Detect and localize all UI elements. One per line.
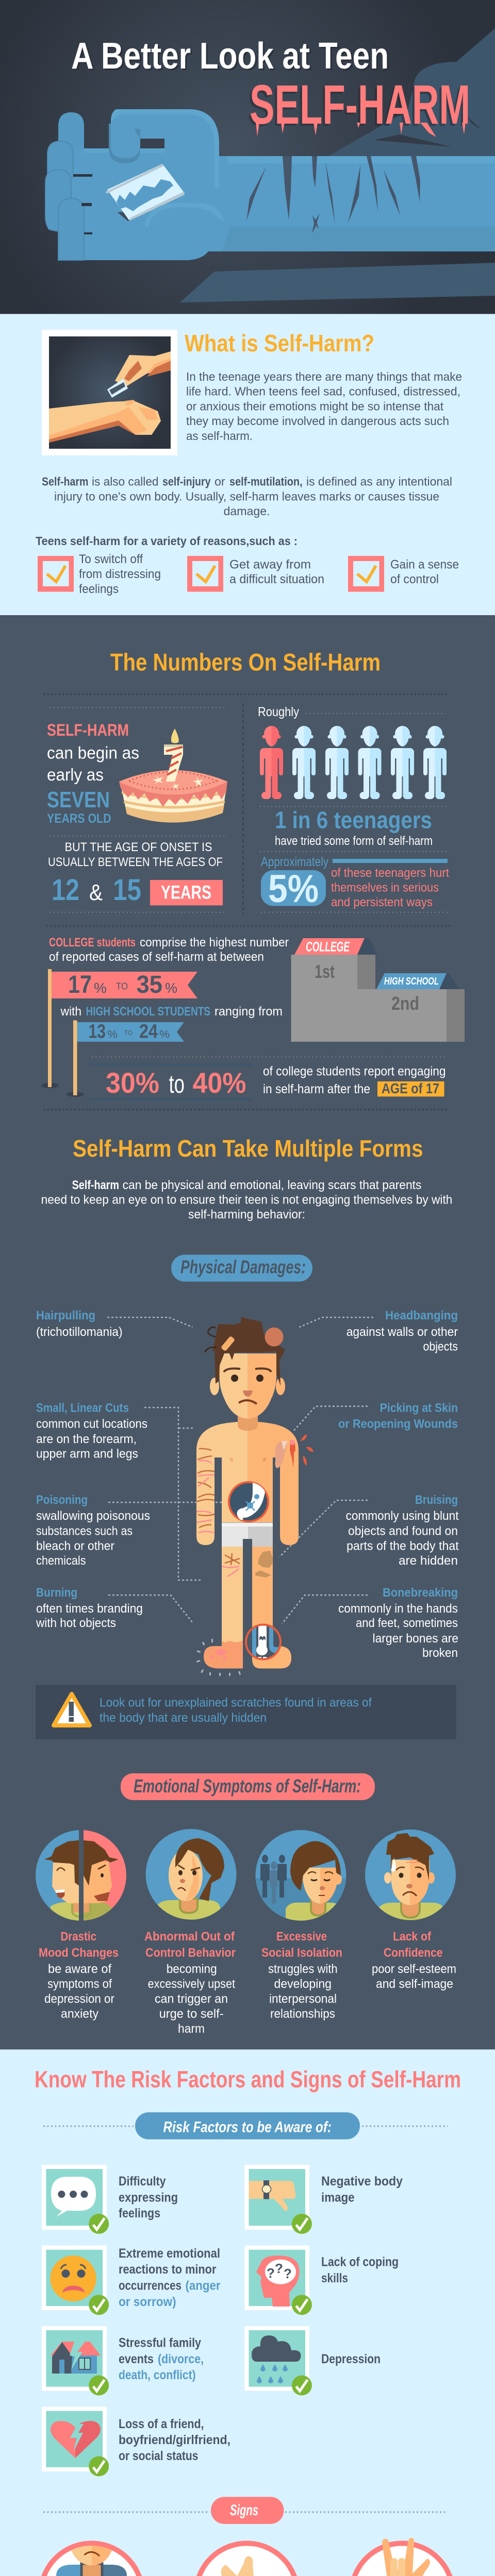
text block: intro paragraph: life hard. When teens feel sad, confused, distressed, (186, 385, 460, 398)
label: bruising: are hidden (399, 1554, 458, 1568)
illustration: lower sleeve (180, 263, 495, 302)
label: burning (36, 1586, 143, 1630)
text block: drastic mood changes: Mood Changes (39, 1946, 119, 1960)
text: extreme emotional reactions: Extreme emotional (119, 2246, 220, 2261)
flag: 17 to 35 percent: TO (116, 981, 128, 991)
flag: 13 to 24 percent: % (159, 1028, 170, 1041)
text block: college students: COLLEGE students (49, 936, 136, 950)
panel: what is self-harm (0, 314, 495, 615)
text block: age of 17: in self-harm after the (263, 1082, 370, 1096)
text block: can begin as early as seven (47, 721, 139, 826)
label: bruising: parts of the body that (346, 1539, 459, 1553)
text: difficulty expressing feelings: Difficulty (119, 2174, 166, 2189)
text: depression: Depression (321, 2352, 381, 2366)
pill: Emotional Symptoms (121, 1773, 375, 1800)
sign: thick wristbands (196, 2543, 302, 2576)
illustration: teenage body with injuries (196, 1317, 314, 1676)
label: burning: with hot objects (36, 1616, 116, 1630)
chart: podium college first high school second: HIGH SCHOOL (384, 976, 439, 987)
text block: drastic mood changes: symptoms of (47, 1977, 112, 1991)
text block: age of onset: USUALLY BETWEEN THE AGES OF (48, 855, 223, 869)
neck (238, 1414, 258, 1431)
checkbox: gain control (348, 556, 384, 592)
text block: out of control behavior: Abnormal Out of (144, 1930, 235, 1944)
icon: warning triangle (54, 1694, 90, 1725)
text block: definition: self-injury (162, 475, 211, 488)
text block: definition: Self-harm (42, 475, 89, 488)
text: lack of coping skills: skills (321, 2271, 348, 2285)
panel: numbers and forms (36, 653, 465, 2033)
text block: can begin as early as seven: SEVEN (47, 787, 110, 812)
text: extreme emotional reactions: reactions to minor (119, 2262, 217, 2277)
text block: age of onset: 12 (52, 873, 79, 907)
icon: sad face (51, 2256, 96, 2301)
text block: drastic mood changes: Drastic (61, 1930, 96, 1944)
text: extreme emotional reactions (119, 2246, 221, 2309)
illustration: hand with razor over wrist (42, 330, 177, 455)
illustration: arm with cuts (219, 156, 495, 251)
text block: out of control behavior (144, 1930, 236, 2036)
legs (222, 1546, 273, 1646)
heading: reasons: Teens self-harm for a variety of reasons,such as : (36, 534, 298, 548)
text block: can begin as early as seven: can begin as (47, 743, 139, 762)
text block: gain control: of control (390, 572, 439, 586)
flag: 13 to 24 percent (67, 1020, 184, 1097)
icon: social isolation face (255, 1830, 346, 1922)
panel: header (0, 0, 495, 314)
flag: 17 to 35 percent: 17 (68, 971, 92, 998)
label: headbanging: objects (423, 1340, 458, 1354)
icon: out of control face (145, 1829, 236, 1920)
pill: Signs (211, 2497, 284, 2524)
label: burning: often times branding (36, 1602, 143, 1616)
stat: approximately 5 percent: Approximately (261, 855, 328, 869)
text block: college students: comprise the highest number (140, 936, 289, 950)
text block: switch off: To switch off (79, 552, 143, 566)
label: bonebreaking: commonly in the hands (338, 1602, 458, 1616)
callout: unexplained scratches warning: the body that are usually hidden (100, 1711, 267, 1725)
torso and arms (196, 1421, 299, 1545)
text: loss of friend: boyfriend/girlfriend, (119, 2433, 230, 2447)
flag: 13 to 24 percent: 24 (139, 1021, 158, 1043)
text block: switch off (79, 552, 161, 596)
text block: can begin as early as seven: YEARS OLD (47, 811, 111, 826)
flag: 17 to 35 percent: % (94, 980, 107, 996)
text block: social isolation (261, 1930, 342, 2021)
illustration: shadow figure sleeve (328, 28, 495, 156)
label: hairpulling (36, 1309, 123, 1339)
pill: Signs: Signs (230, 2502, 258, 2519)
label: poisoning: swallowing poisonous (36, 1509, 150, 1523)
text block: can begin as early as seven: early as (47, 765, 104, 784)
text: loss of friend: or social status (119, 2449, 198, 2463)
sign: unexplained scars (352, 2538, 453, 2576)
label: bonebreaking: Bonebreaking (383, 1586, 458, 1600)
text block: drastic mood changes (39, 1930, 119, 2021)
label: bruising: commonly using blunt (345, 1509, 459, 1523)
text: high school students ranging from: ranging from (214, 1005, 283, 1019)
text block: drastic mood changes: be aware of (48, 1962, 111, 1976)
text block: definition: damage. (224, 504, 270, 518)
card: difficulty expressing feelings (42, 2165, 109, 2234)
text block: lack of confidence: Confidence (384, 1946, 442, 1960)
sign: long sleeves (41, 2543, 142, 2576)
text block: drastic mood changes: depression or (44, 1992, 114, 2006)
stat: approximately 5 percent: 5% (268, 867, 319, 911)
text block: intro paragraph: In the teenage years there are many things that make (186, 370, 462, 383)
text block: definition: is also called (92, 475, 159, 488)
illustration: birthday cake with number seven candle (119, 728, 227, 823)
flag: 17 to 35 percent: 35 (136, 971, 162, 998)
text: negative body image: Negative body (321, 2174, 403, 2189)
text: Roughly: Roughly (258, 705, 299, 719)
text block: social isolation: Excessive (276, 1930, 327, 1944)
flag: 13 to 24 percent: % (107, 1028, 118, 1041)
text block: out of control behavior: excessively upset (148, 1977, 235, 1991)
icon: broken heart (51, 2421, 101, 2458)
icon: head with question marks (256, 2256, 300, 2307)
text: loss of friend (119, 2417, 230, 2463)
label: small linear cuts (36, 1401, 147, 1461)
text block: age of onset: BUT THE AGE OF ONSET IS (65, 840, 212, 854)
label: bonebreaking: broken (422, 1646, 458, 1660)
label: poisoning: substances such as (36, 1524, 133, 1538)
text: loss of friend: Loss of a friend, (119, 2417, 204, 2431)
text block: gain control: Gain a sense (390, 557, 459, 572)
stat: 1 in 6 teenagers: 1 in 6 teenagers (275, 807, 432, 834)
label: bruising (345, 1493, 459, 1568)
heading: Self-Harm Can Take Multiple Forms: Self-Harm Can Take Multiple Forms (73, 1135, 423, 1162)
icon: cracked house (51, 2342, 101, 2374)
text block: out of control behavior: Control Behavior (145, 1946, 236, 1960)
pill: Risk Factors: Risk Factors to be Aware of: (163, 2119, 332, 2136)
text block: age of 17: of college students report engaging (263, 1064, 446, 1079)
stat: 30 to 40 percent: to (169, 1070, 185, 1098)
text: extreme emotional reactions: occurrences (119, 2279, 182, 2293)
text: high school students ranging from: HIGH SCHOOL STUDENTS (86, 1005, 210, 1019)
text block: lack of confidence (372, 1930, 456, 1991)
head (205, 1317, 285, 1419)
text block: lack of confidence: poor self-esteem (372, 1962, 456, 1976)
icon: head with question marks: ? (267, 2265, 275, 2281)
flag: 17 to 35 percent: % (165, 980, 177, 996)
text block: age of onset: & (89, 880, 103, 905)
heading: The Numbers On Self-Harm: The Numbers On Self-Harm (110, 649, 381, 676)
heading: What is Self-Harm?: What is Self-Harm? (185, 330, 374, 357)
text block: intro paragraph (186, 370, 462, 443)
label: poisoning: bleach or other (36, 1539, 114, 1553)
text block: out of control behavior: becoming (167, 1962, 217, 1976)
card: stressful family events (42, 2326, 109, 2396)
text: difficulty expressing feelings: expressing (119, 2190, 178, 2205)
card: lack of coping skills (244, 2245, 312, 2315)
label: poisoning: Poisoning (36, 1493, 88, 1507)
text block: gain control (390, 557, 459, 586)
pill: Physical Damages (171, 1255, 312, 1282)
text block: get away (229, 557, 324, 586)
text block: social isolation: Social Isolation (261, 1946, 342, 1960)
broken bone callout (245, 1623, 281, 1662)
label: poisoning: chemicals (36, 1554, 86, 1568)
label: bonebreaking: larger bones are (372, 1632, 458, 1646)
text block: switch off: feelings (79, 582, 119, 596)
stat: approximately 5 percent: and persistent ways (331, 895, 433, 909)
arm cuts (196, 1449, 214, 1533)
text block: out of control behavior: urge to self- (159, 2007, 224, 2021)
label: picking at skin: or Reopening Wounds (338, 1417, 458, 1431)
text: difficulty expressing feelings (119, 2174, 178, 2221)
icon: mood changes face (36, 1830, 126, 1921)
label: bonebreaking (338, 1586, 458, 1660)
leg scars and bruises (222, 1551, 273, 1578)
stat: 30 to 40 percent: 30% (106, 1066, 159, 1099)
text block: age of 17: AGE of 17 (382, 1080, 439, 1096)
text: extreme emotional reactions: or sorrow) (119, 2295, 176, 2309)
text block: intro paragraph: as self-harm. (186, 429, 253, 443)
illustration: fist holding razor blade (45, 109, 230, 260)
checkbox: get away (187, 556, 223, 592)
text: difficulty expressing feelings: feelings (119, 2206, 160, 2221)
stat: approximately 5 percent: of these teenagers hurt (331, 866, 449, 880)
text block: age of onset (48, 840, 223, 907)
text block: forms intro: can be physical and emotional, leaving scars that parents (123, 1178, 421, 1192)
text block: can begin as early as seven: SELF-HARM (47, 721, 129, 739)
flag: 13 to 24 percent: TO (124, 1029, 133, 1037)
text block: out of control behavior: can trigger an (155, 1992, 228, 2006)
checkbox: switch off (38, 556, 74, 592)
card: negative body image (244, 2165, 312, 2234)
card: extreme emotional reactions (42, 2245, 109, 2315)
label: small linear cuts: common cut locations (36, 1417, 147, 1431)
right foot (252, 1646, 291, 1668)
icon: thumbs down with watch (249, 2180, 296, 2211)
label: picking at skin (338, 1401, 458, 1431)
label: headbanging: against walls or other (346, 1325, 458, 1339)
text block: definition: injury to one's own body. Usually, self-harm leaves marks or causes tissue (54, 489, 439, 503)
text block: definition: self-mutilation, (229, 475, 303, 488)
label: bruising: objects and found on (348, 1524, 458, 1538)
text block: forms intro: self-harming behavior: (188, 1208, 305, 1222)
label: bruising: Bruising (415, 1493, 458, 1507)
label: poisoning (36, 1493, 150, 1568)
title: A Better Look at Teen: A Better Look at Teen (71, 36, 389, 77)
text: negative body image (321, 2174, 403, 2205)
text block: lack of confidence: Lack of (393, 1930, 432, 1944)
label: headbanging (346, 1309, 458, 1354)
pill: Physical Damages: Physical Damages: (180, 1257, 306, 1278)
text block: age of onset: 15 (113, 873, 141, 907)
text: negative body image: image (321, 2190, 355, 2205)
text block: forms intro (41, 1178, 452, 1222)
icon: speech bubble (51, 2177, 96, 2217)
text block: age of onset: YEARS (161, 882, 211, 903)
text block: intro paragraph: or anxious their emotions might be so intense that (186, 399, 444, 413)
callout: unexplained scratches warning (36, 1685, 456, 1739)
chart: podium college first high school second (291, 938, 465, 1042)
text: lack of coping skills (321, 2255, 399, 2285)
flag: 13 to 24 percent: 13 (89, 1021, 106, 1043)
pill: Risk Factors (135, 2112, 360, 2139)
text: stressful family events (119, 2336, 204, 2382)
text block: drastic mood changes: anxiety (61, 2007, 98, 2021)
label: picking at skin: Picking at Skin (380, 1401, 458, 1415)
card: loss of friend (42, 2406, 109, 2476)
text block: definition: or (214, 475, 225, 488)
text block: intro paragraph: they may become involved in dangerous acts such (186, 414, 449, 428)
stat: 30 to 40 percent (90, 1063, 252, 1100)
label: hairpulling: (trichotillomania) (36, 1325, 123, 1339)
burned foot (204, 1640, 243, 1668)
text block: definition: is defined as any intentional (306, 475, 452, 488)
text block: out of control behavior: harm (178, 2022, 205, 2036)
text: stressful family events: death, conflict) (119, 2368, 196, 2382)
text block: age of 17 (263, 1064, 446, 1096)
label: burning: Burning (36, 1586, 77, 1600)
text: high school students ranging from: with (60, 1005, 81, 1019)
callout: unexplained scratches warning: Look out for unexplained scratches found in areas of (100, 1696, 372, 1709)
underwear (222, 1523, 273, 1669)
stat: 1 in 6 teenagers: have tried some form of self-harm (275, 834, 433, 848)
stat: approximately 5 percent: themselves in serious (331, 881, 439, 894)
icon: head with question marks: ? (284, 2266, 292, 2281)
panel: risk factors and signs (0, 2049, 495, 2576)
chart: podium college first high school second: 1st (315, 961, 335, 982)
pill: Emotional Symptoms: Emotional Symptoms of Self-Harm: (134, 1775, 361, 1797)
shoulder wound (275, 1434, 314, 1468)
label: bonebreaking: and feet, sometimes (356, 1616, 458, 1630)
text block: college students (49, 936, 289, 964)
label: small linear cuts: upper arm and legs (36, 1447, 138, 1461)
text block: get away: Get away from (229, 557, 311, 572)
icon row: one in six people (260, 726, 447, 799)
chart: podium college first high school second: COLLEGE (306, 939, 350, 954)
label: headbanging: Headbanging (385, 1309, 458, 1323)
stat: approximately 5 percent (261, 855, 449, 911)
illustration: shadow wedges (374, 116, 482, 147)
text block: switch off: from distressing (79, 567, 161, 581)
chart: podium college first high school second: 2nd (391, 993, 419, 1014)
text: stressful family events: events (119, 2352, 154, 2366)
card: depression (244, 2326, 312, 2396)
text block: forms intro: Self-harm (72, 1178, 119, 1192)
stomach callout (229, 1481, 268, 1521)
text: stressful family events: (divorce, (158, 2352, 204, 2366)
text block: social isolation: interpersonal (269, 1992, 337, 2006)
text block: definition (42, 475, 452, 518)
stat: 1 in 6 teenagers (275, 807, 433, 848)
text block: social isolation: developing (274, 1977, 332, 1991)
label: small linear cuts: are on the forearm, (36, 1432, 137, 1446)
text: stressful family events: Stressful family (119, 2336, 201, 2350)
stat: 30 to 40 percent: 40% (193, 1066, 246, 1099)
label: small linear cuts: Small, Linear Cuts (36, 1401, 129, 1415)
icon: lack of confidence face (365, 1829, 456, 1920)
icon: head with question marks: ? (275, 2261, 283, 2276)
title: A Better Look at Teen: A Better Look at Teen (73, 37, 390, 78)
text: extreme emotional reactions: (anger (186, 2279, 221, 2293)
text block: social isolation: relationships (270, 2007, 335, 2021)
text block: get away: a difficult situation (229, 572, 324, 586)
text block: social isolation: struggles with (268, 1962, 338, 1976)
flag: 17 to 35 percent (41, 969, 197, 1088)
text block: college students: of reported cases of self-harm at between (49, 950, 264, 964)
text: lack of coping skills: Lack of coping (321, 2255, 399, 2269)
label: hairpulling: Hairpulling (36, 1309, 95, 1323)
text block: lack of confidence: and self-image (376, 1977, 453, 1991)
text block: forms intro: need to keep an eye on to ensure their teen is not engaging themselves by with (41, 1193, 452, 1207)
icon: rain cloud (252, 2335, 301, 2383)
